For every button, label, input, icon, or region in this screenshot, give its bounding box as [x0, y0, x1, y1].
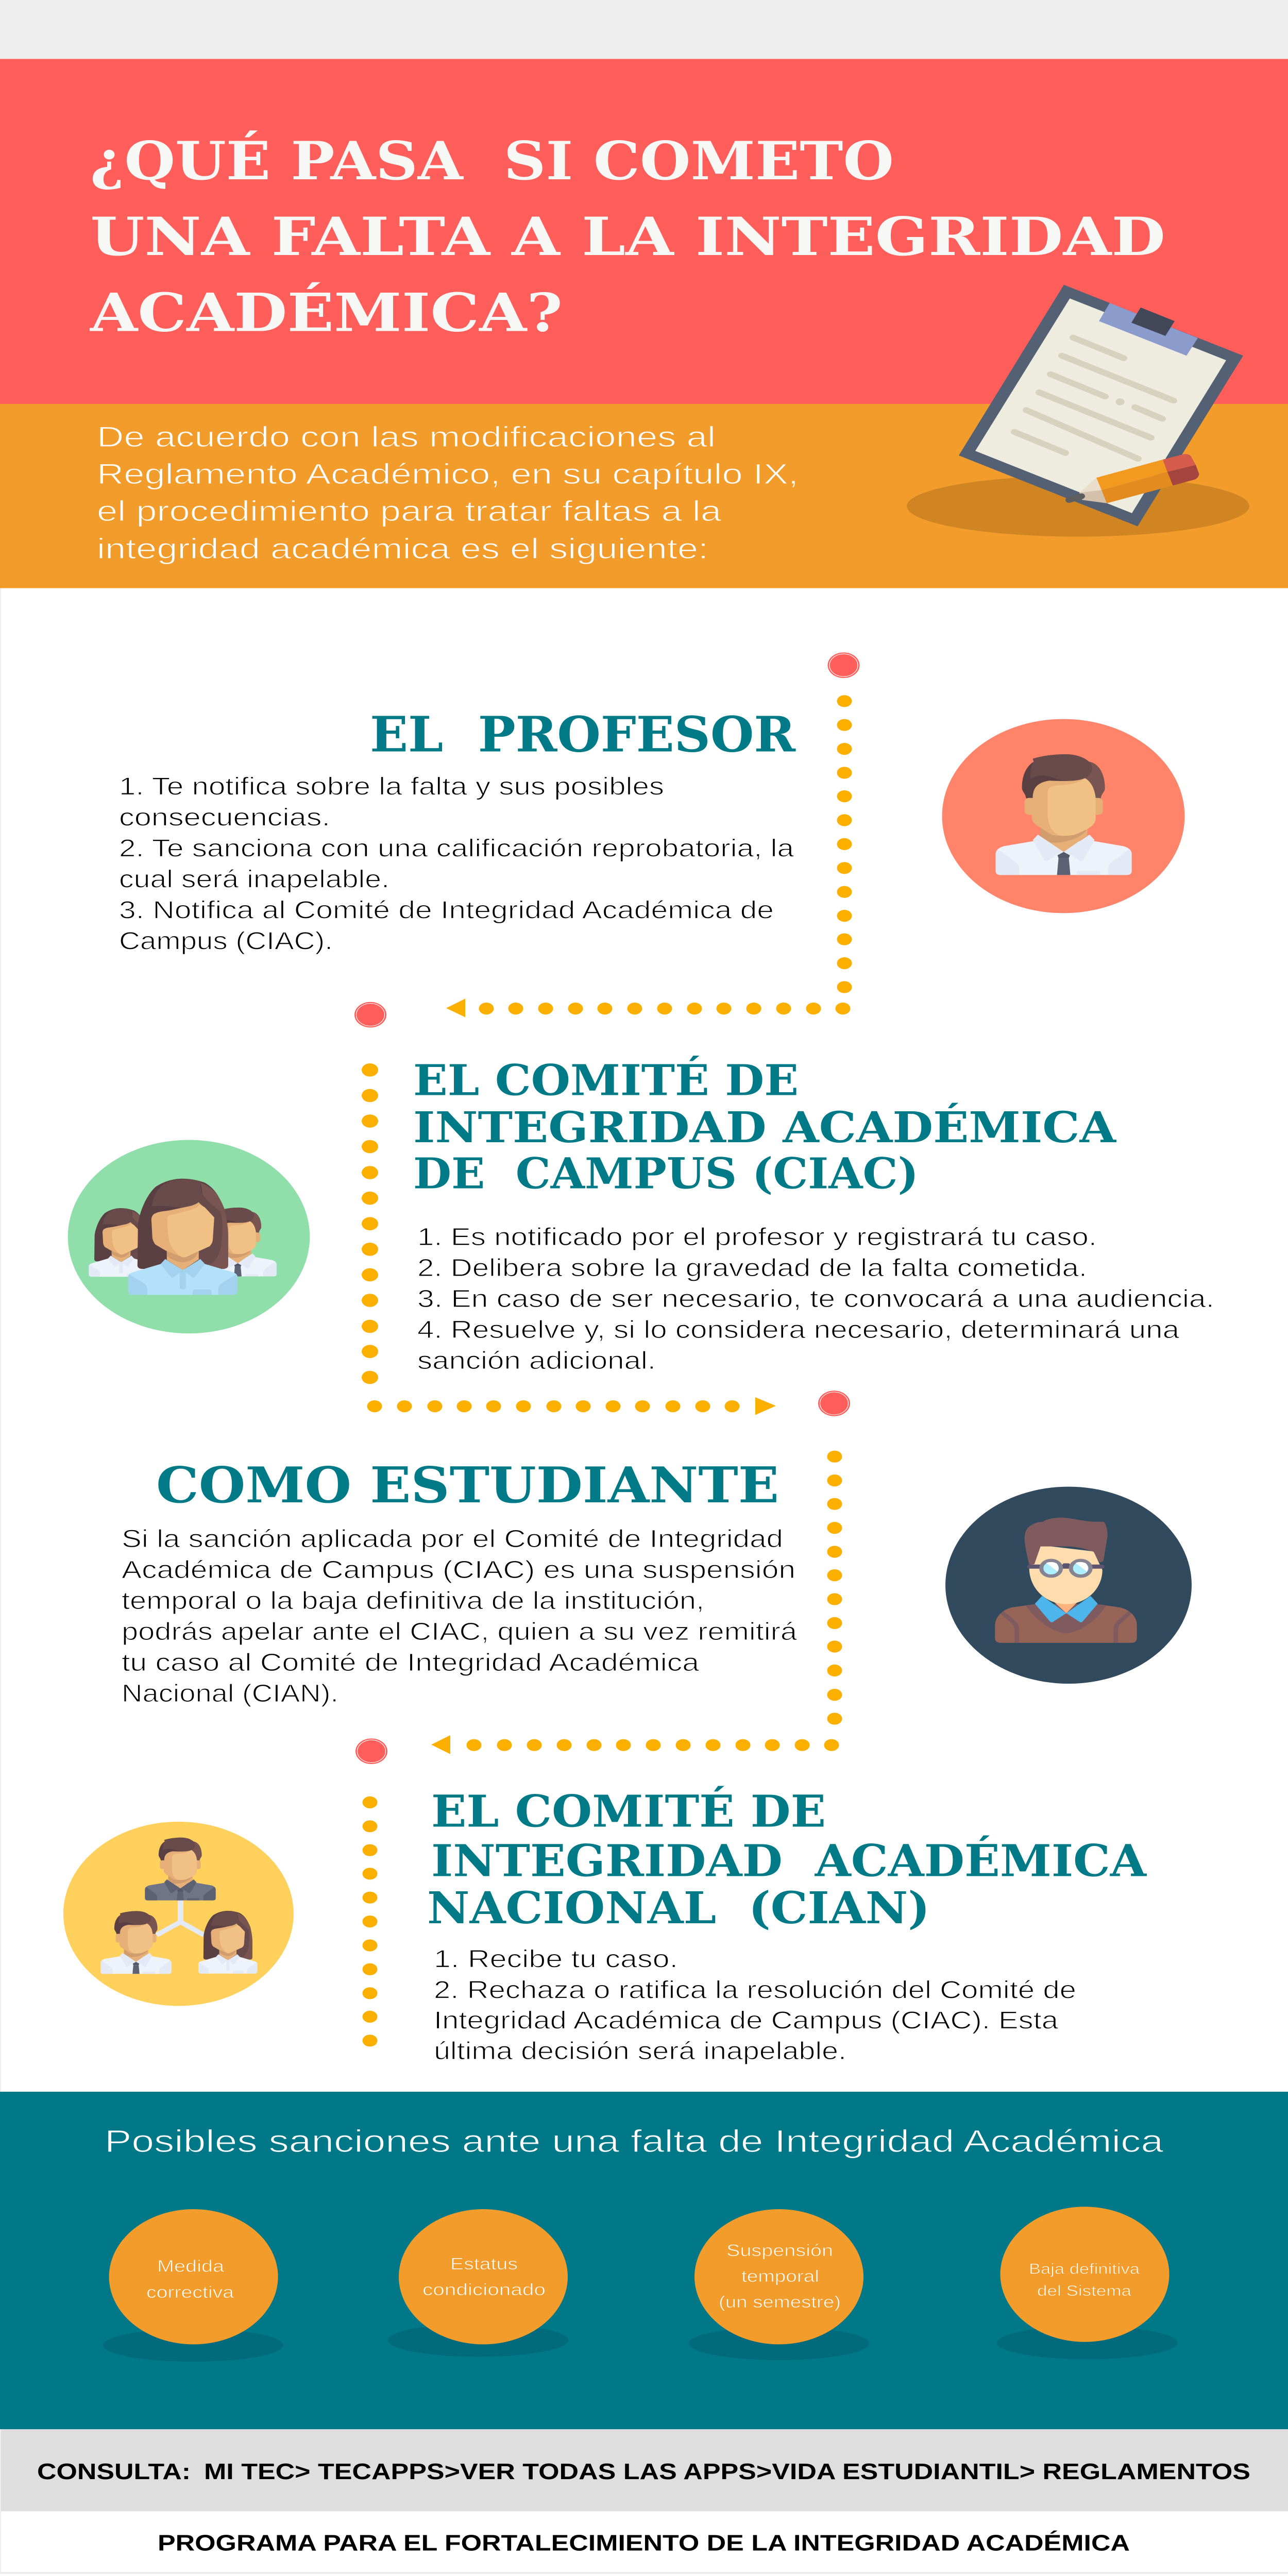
dotted path 2: vertical and horizontal with arrow — [362, 1063, 776, 1415]
text block: como estudiante paragraph — [122, 1525, 798, 1707]
title — [90, 130, 1165, 344]
dotted path 4: vertical — [363, 1797, 377, 2046]
heading: el comité de integridad académica de campus: INTEGRIDAD ACADÉMICA — [413, 1102, 1117, 1152]
sanction: medida correctiva — [103, 2209, 283, 2362]
background: white page — [0, 588, 1288, 2092]
step marker 2: red dot — [354, 1002, 386, 1027]
title: ACADÉMICA? — [90, 282, 563, 344]
text block: ciac list: 4. Resuelve y, si lo considera necesario, determinará una — [417, 1316, 1180, 1343]
text block: como estudiante paragraph: tu caso al Comité de Integridad Académica — [122, 1649, 700, 1676]
text: consulta path: CONSULTA: — [37, 2459, 191, 2484]
heading: el profesor: EL PROFESOR — [370, 706, 796, 763]
heading: el comité de integridad académica nacional: EL COMITÉ DE — [431, 1785, 826, 1837]
step marker 4: red dot — [355, 1738, 387, 1764]
sanction: estatus condicionado — [388, 2209, 568, 2357]
text block: como estudiante paragraph: podrás apelar ante el CIAC, quien a su vez remitirá — [122, 1618, 798, 1646]
text block: como estudiante paragraph: Académica de Campus (CIAC) es una suspensión — [122, 1556, 795, 1584]
intro paragraph: Reglamento Académico, en su capítulo IX, — [97, 459, 799, 490]
icon: committee avatar — [68, 1140, 310, 1333]
heading: el comité de integridad académica de campus — [413, 1055, 1117, 1198]
intro paragraph: el procedimiento para tratar faltas a la — [97, 496, 722, 528]
sanction: baja definitiva — [997, 2207, 1177, 2359]
sanction: baja definitiva: del Sistema — [1037, 2282, 1132, 2299]
step marker 3: red dot — [818, 1391, 850, 1416]
text block: el profesor list: 3. Notifica al Comité de Integridad Académica de — [119, 896, 774, 924]
text block: el profesor list: 2. Te sanciona con una calificación reprobatoria, la — [119, 834, 794, 862]
section: el profesor — [119, 706, 796, 955]
text block: cian list: última decisión será inapelable. — [434, 2037, 846, 2064]
text block: cian list: 1. Recibe tu caso. — [434, 1945, 678, 1973]
intro panel: orange — [0, 404, 1288, 588]
text block: como estudiante paragraph: temporal o la baja definitiva de la institución, — [122, 1587, 704, 1615]
icon: national committee avatar — [63, 1822, 294, 2006]
section: como estudiante — [122, 1456, 798, 1707]
text block: como estudiante paragraph: Nacional (CIAN). — [122, 1680, 338, 1707]
icon: clipboard and pencil — [907, 285, 1249, 537]
icon: student avatar — [945, 1487, 1192, 1684]
text: consulta path: MI TEC> TECAPPS>VER TODAS LAS APPS>VIDA ESTUDIANTIL> REGLAMENTOS — [204, 2459, 1250, 2484]
text block: ciac list: 1. Es notificado por el profesor y registrará tu caso. — [417, 1223, 1097, 1250]
text block: ciac list: 2. Delibera sobre la gravedad de la falta cometida. — [417, 1254, 1087, 1281]
sanction: estatus condicionado: condicionado — [422, 2280, 546, 2299]
text block: como estudiante paragraph: Si la sanción aplicada por el Comité de Integridad — [122, 1525, 783, 1553]
text block: cian list — [434, 1945, 1076, 2064]
text block: el profesor list: 1. Te notifica sobre la falta y sus posibles — [119, 772, 664, 800]
header panel: title on red — [0, 59, 1288, 404]
sanction: suspensión temporal: Suspensión — [726, 2241, 833, 2260]
section: comité de campus — [413, 1055, 1214, 1374]
intro paragraph: integridad académica es el siguiente: — [97, 533, 708, 565]
sanction: suspensión temporal: (un semestre) — [719, 2293, 841, 2311]
text block: ciac list: 3. En caso de ser necesario, te convocará a una audiencia. — [417, 1285, 1214, 1312]
title: UNA FALTA A LA INTEGRIDAD — [90, 206, 1165, 268]
heading: el comité de integridad académica nacional: NACIONAL (CIAN) — [427, 1882, 930, 1934]
dotted path 3: vertical and horizontal with arrow — [431, 1451, 842, 1754]
text: programa: PROGRAMA PARA EL FORTALECIMIENTO DE LA INTEGRIDAD ACADÉMICA — [158, 2530, 1130, 2555]
text block: ciac list: sanción adicional. — [417, 1347, 656, 1374]
sanction: estatus condicionado: Estatus — [450, 2255, 518, 2273]
text block: el profesor list: consecuencias. — [119, 803, 330, 831]
heading: el comité de integridad académica de campus: EL COMITÉ DE — [413, 1055, 799, 1105]
text block: el profesor list — [119, 772, 794, 955]
heading: como estudiante: COMO ESTUDIANTE — [156, 1456, 779, 1514]
text block: ciac list — [417, 1223, 1214, 1374]
heading: el comité de integridad académica nacional — [427, 1785, 1147, 1934]
intro paragraph: De acuerdo con las modificaciones al — [97, 421, 716, 453]
heading: el comité de integridad académica de campus: DE CAMPUS (CIAC) — [413, 1148, 919, 1198]
heading: el comité de integridad académica nacional: INTEGRIDAD ACADÉMICA — [431, 1835, 1147, 1887]
text block: el profesor list: cual será inapelable. — [119, 865, 389, 893]
title: ¿QUÉ PASA SI COMETO — [90, 130, 894, 192]
icon: professor avatar — [942, 719, 1185, 913]
section: comité nacional — [427, 1785, 1147, 2064]
heading: posibles sanciones: Posibles sanciones ante una falta de Integridad Académica — [105, 2124, 1164, 2159]
panel: consulta bar — [0, 2429, 1288, 2511]
dotted path 1: vertical and horizontal with arrow — [446, 695, 852, 1017]
text block: el profesor list: Campus (CIAC). — [119, 927, 333, 955]
sanction: suspensión temporal — [689, 2209, 869, 2360]
sanction: suspensión temporal: temporal — [741, 2267, 819, 2285]
text block: cian list: Integridad Académica de Campus (CIAC). Esta — [434, 2006, 1059, 2034]
sanction: baja definitiva: Baja definitiva — [1029, 2260, 1140, 2277]
background: top band — [0, 0, 1288, 59]
panel: posibles sanciones — [0, 2092, 1288, 2429]
panel: programa footer — [0, 2511, 1288, 2574]
sanction: medida correctiva: Medida — [157, 2257, 225, 2276]
sanction: medida correctiva: correctiva — [146, 2283, 234, 2301]
text block: cian list: 2. Rechaza o ratifica la resolución del Comité de — [434, 1976, 1076, 2004]
intro paragraph — [97, 421, 799, 565]
step marker 1: red dot — [827, 652, 859, 678]
